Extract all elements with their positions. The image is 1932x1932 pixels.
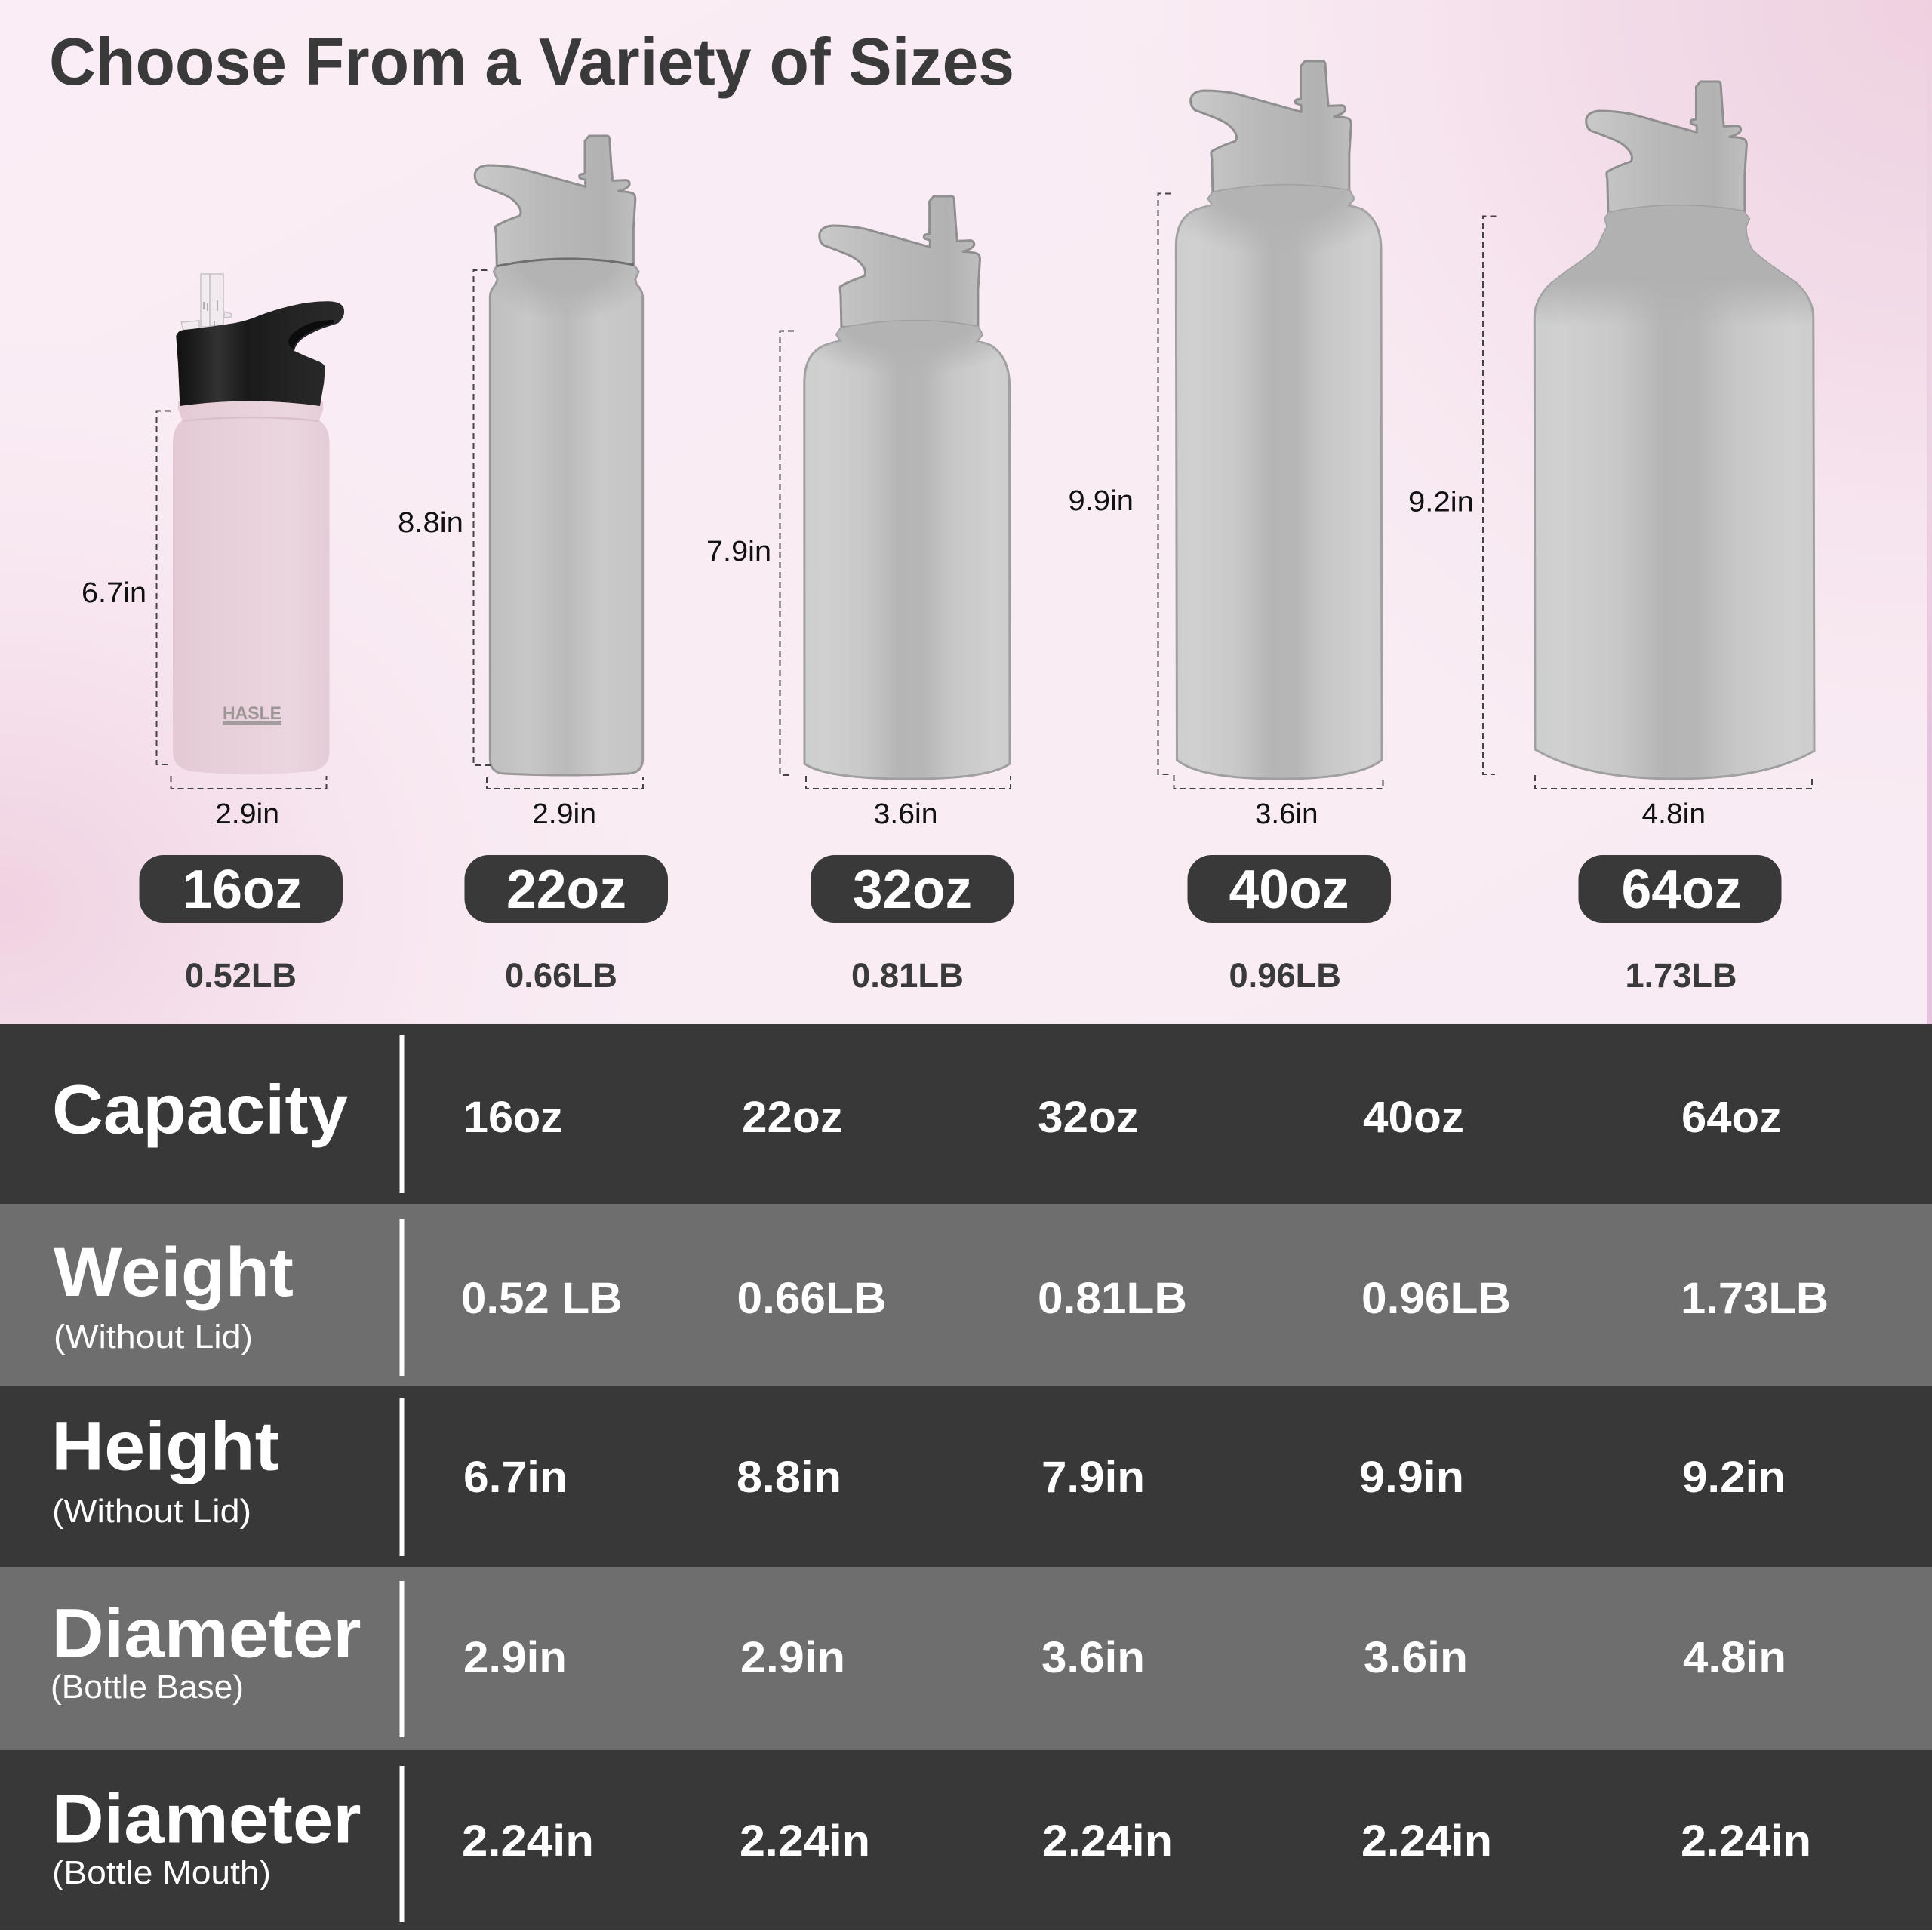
brand mark: HASLE (223, 703, 281, 724)
body silhouette (804, 321, 1010, 779)
table row: diameter bottle base (0, 1567, 1932, 1750)
row values: 4.8in (1683, 1633, 1786, 1682)
row values (463, 1093, 1782, 1142)
diameter bracket (171, 776, 326, 789)
diameter label: 2.9in (532, 798, 596, 830)
weight: 0.96LB (1229, 956, 1341, 995)
size pill: 16oz (183, 860, 302, 920)
title: Choose From a Variety of Sizes (49, 24, 1014, 99)
row values: 16oz (463, 1093, 563, 1142)
row values: 2.9in (463, 1633, 567, 1682)
row values: 40oz (1363, 1093, 1464, 1142)
right edge strip (1927, 0, 1932, 1025)
row label: Weight (54, 1234, 294, 1311)
diameter label: 4.8in (1642, 798, 1706, 830)
weight: 0.66LB (505, 956, 617, 995)
diameter label: 3.6in (1255, 798, 1318, 830)
row values: 0.81LB (1038, 1274, 1187, 1323)
straw (181, 274, 232, 330)
lid silhouette (820, 196, 980, 327)
row values: 64oz (1681, 1093, 1782, 1142)
row values: 8.8in (737, 1453, 841, 1502)
row label: Capacity (52, 1072, 348, 1149)
height label: 9.2in (1408, 486, 1474, 518)
diameter bracket (1174, 775, 1383, 789)
body silhouette (1534, 205, 1814, 779)
diameter bracket (806, 776, 1011, 789)
row values: 2.24in (1042, 1817, 1173, 1866)
row values: 2.9in (740, 1633, 845, 1682)
height label: 7.9in (706, 536, 771, 568)
height bracket (474, 270, 491, 765)
row sublabel: (Without Lid) (54, 1318, 253, 1355)
row values: 0.52 LB (461, 1274, 622, 1323)
row values (463, 1453, 1786, 1502)
height label: 9.9in (1069, 485, 1134, 517)
diameter bracket (487, 777, 643, 789)
size pill: 40oz (1229, 860, 1349, 920)
size pill (139, 855, 343, 923)
row values: 7.9in (1041, 1453, 1145, 1502)
size pill (1579, 855, 1781, 923)
weight: 0.52LB (185, 956, 297, 995)
row values: 9.2in (1682, 1453, 1786, 1502)
height bracket (780, 331, 794, 775)
body silhouette (1176, 185, 1382, 779)
bottle: 64oz (1408, 82, 1814, 995)
height label: 8.8in (398, 507, 463, 539)
bottle: 40oz (1069, 61, 1391, 995)
row values: 22oz (742, 1093, 843, 1142)
table row: weight (0, 1204, 1932, 1386)
row values: 2.24in (1681, 1817, 1811, 1866)
bottle: 32oz (706, 196, 1014, 995)
lid handle opening (288, 320, 334, 349)
row label: Height (51, 1408, 279, 1485)
size pill: 22oz (506, 860, 626, 920)
row values: 3.6in (1364, 1633, 1468, 1682)
size pill: 32oz (853, 860, 972, 920)
bottle: 22oz (398, 136, 668, 995)
diameter bracket (1535, 775, 1812, 789)
row sublabel: (Bottle Mouth) (52, 1854, 271, 1891)
row values: 1.73LB (1681, 1274, 1829, 1323)
pink body (173, 401, 330, 774)
bottle: 16oz (82, 274, 344, 995)
row values: 2.24in (740, 1817, 870, 1866)
diameter label: 2.9in (215, 798, 279, 830)
neck shading (183, 417, 319, 421)
body silhouette (490, 259, 643, 775)
row values: 6.7in (463, 1453, 568, 1502)
row values: 2.24in (1361, 1817, 1492, 1866)
row label: Diameter (51, 1781, 361, 1858)
height bracket (157, 411, 171, 764)
row sublabel: (Bottle Base) (51, 1669, 244, 1706)
lid seam (497, 259, 634, 266)
lid silhouette (475, 136, 635, 266)
row values: 3.6in (1041, 1633, 1145, 1682)
row values: 9.9in (1359, 1453, 1464, 1502)
weight: 0.81LB (851, 956, 964, 995)
lid silhouette (1586, 82, 1746, 212)
diameter label: 3.6in (874, 798, 937, 830)
table row: diameter bottle mouth (0, 1750, 1932, 1930)
row values: 0.96LB (1361, 1274, 1511, 1323)
table row: capacity (0, 1024, 1932, 1204)
background panel (0, 0, 1932, 1026)
size pill: 64oz (1621, 860, 1742, 920)
row values (462, 1817, 1811, 1866)
size pill (811, 855, 1014, 923)
row values: 0.66LB (737, 1274, 886, 1323)
lid silhouette (1191, 61, 1351, 192)
row values: 32oz (1038, 1093, 1139, 1142)
black lid (176, 301, 344, 406)
row sublabel: (Without Lid) (52, 1493, 251, 1530)
row values (463, 1633, 1786, 1682)
size pill (1188, 855, 1391, 923)
row label: Diameter (51, 1595, 361, 1672)
height label: 6.7in (82, 577, 146, 609)
height bracket (1483, 216, 1496, 774)
row values (461, 1274, 1829, 1323)
table row: height (0, 1386, 1932, 1567)
height bracket (1158, 193, 1171, 774)
row values: 2.24in (462, 1817, 594, 1866)
weight: 1.73LB (1626, 956, 1737, 995)
size pill (465, 855, 668, 923)
